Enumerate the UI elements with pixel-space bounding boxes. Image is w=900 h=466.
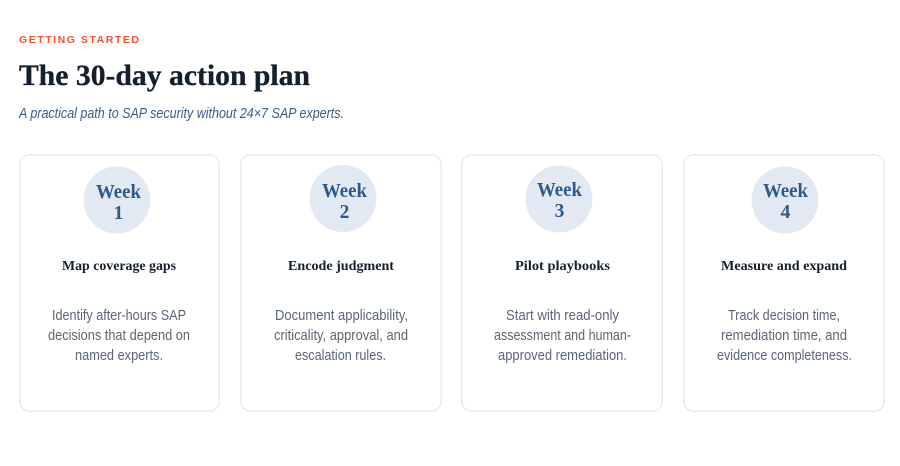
panel: week 3 [462, 155, 662, 411]
text: week 2 description: Document applicability, [275, 308, 408, 324]
heading: map coverage gaps: Map coverage gaps [62, 259, 177, 274]
text: week 3 description: Start with read-only [506, 308, 620, 324]
icon: week 2 badge: 2 [340, 202, 349, 223]
heading: pilot playbooks: Pilot playbooks [515, 259, 611, 274]
text: week 2 description [274, 308, 408, 364]
panel: week 1 [20, 155, 219, 411]
text: week 1 description: named experts. [75, 348, 163, 364]
icon: week 4 badge: 4 [781, 202, 791, 223]
subtitle: A practical path to SAP security without 24×7 SAP experts. [18, 105, 344, 122]
text: week 3 description: approved remediation. [498, 348, 627, 364]
text: week 1 description: decisions that depend on [48, 328, 190, 344]
text: week 4 description: remediation time, and [721, 328, 847, 344]
text: week 4 description: Track decision time, [728, 308, 840, 324]
icon: week 1 badge [84, 166, 150, 234]
icon: week 2 badge [310, 165, 376, 232]
text: week 4 description [717, 308, 852, 364]
icon: week 3 badge [526, 166, 592, 232]
text: week 1 description [48, 308, 190, 364]
icon: week 3 badge: Week [537, 180, 582, 201]
text: week 1 description: Identify after-hours SAP [52, 308, 186, 324]
text: week 3 description [494, 308, 631, 364]
text: week 3 description: assessment and human- [494, 328, 631, 344]
panel: week 4 [684, 155, 884, 411]
icon: week 4 badge [752, 166, 818, 234]
text: week 2 description: escalation rules. [295, 348, 386, 364]
text: week 4 description: evidence completeness. [717, 348, 852, 364]
panel: week 2 [241, 155, 441, 411]
heading: encode judgment: Encode judgment [288, 259, 394, 274]
title: The 30-day action plan [19, 59, 310, 92]
icon: week 4 badge: Week [763, 181, 808, 202]
icon: week 1 badge: 1 [114, 203, 123, 224]
icon: week 1 badge: Week [96, 182, 141, 203]
text: week 2 description: criticality, approval, and [274, 328, 408, 344]
heading: measure and expand: Measure and expand [721, 259, 847, 274]
icon: week 2 badge: Week [322, 181, 367, 202]
eyebrow: GETTING STARTED [19, 34, 139, 46]
icon: week 3 badge: 3 [555, 201, 565, 222]
